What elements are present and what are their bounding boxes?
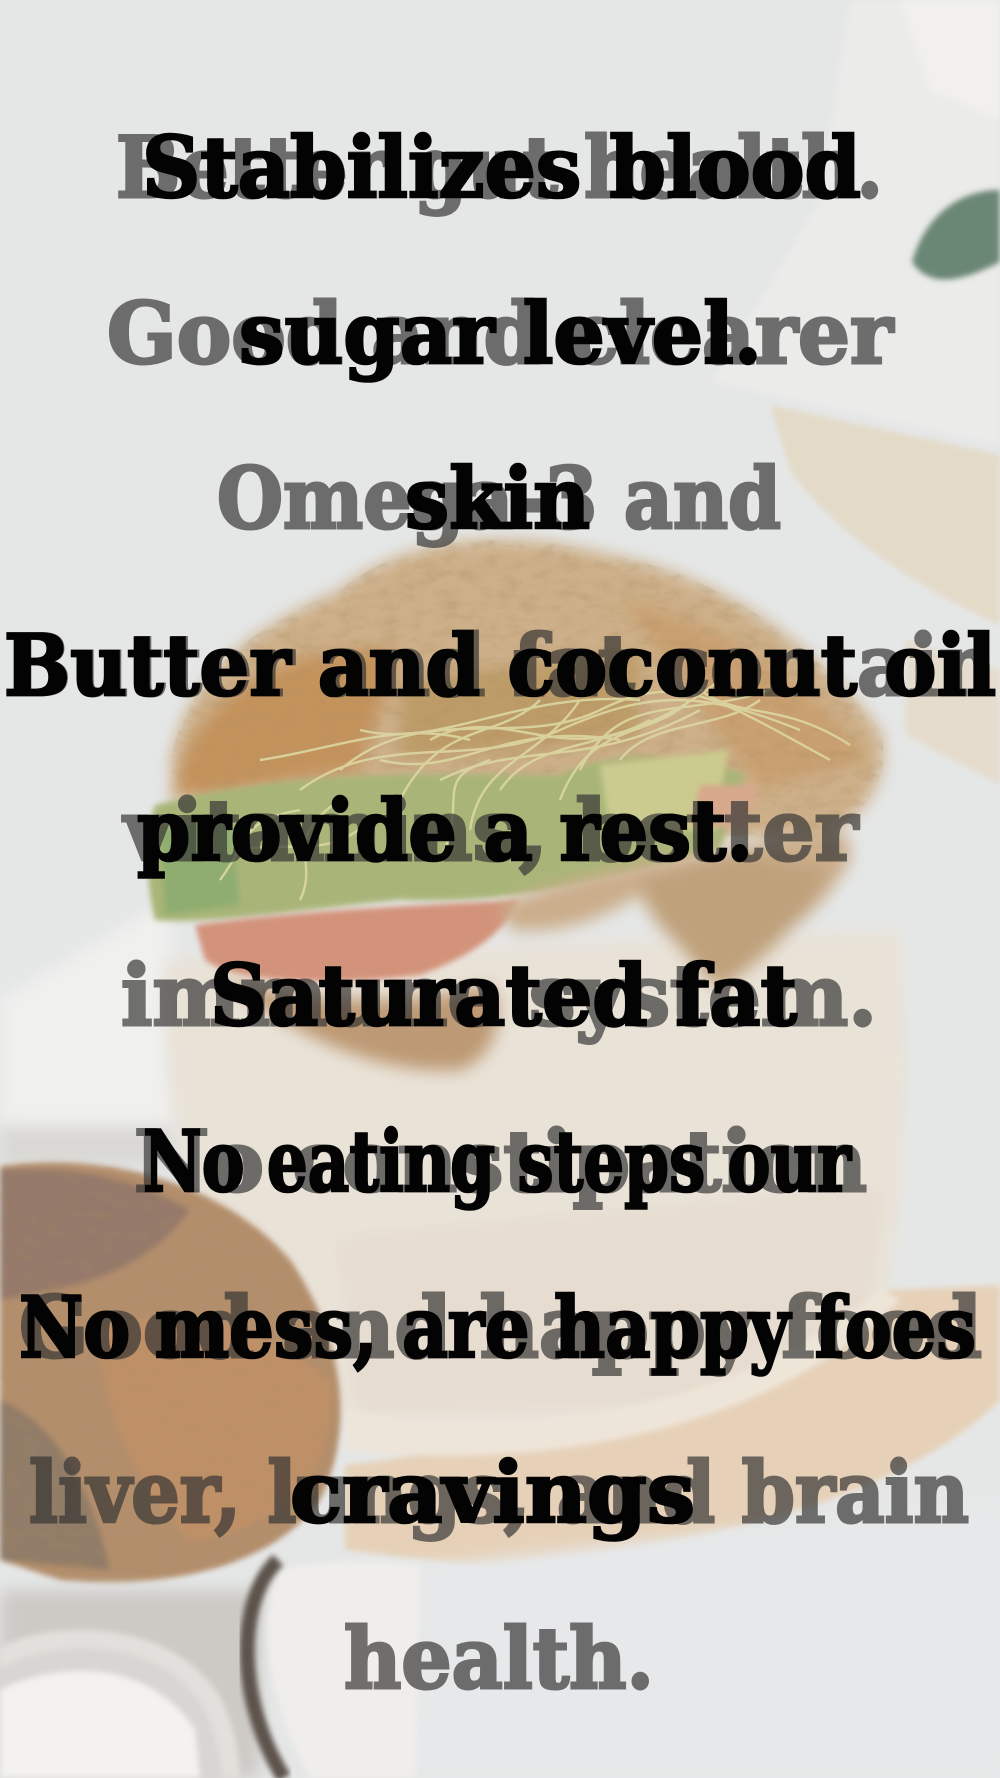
croissant top bun xyxy=(170,540,884,840)
line: vitamins, better: vitamins, better xyxy=(122,781,860,880)
line: Good and clearer: Good and clearer xyxy=(107,284,895,383)
coconut shell xyxy=(0,1162,340,1582)
avocado layer xyxy=(148,750,745,921)
light left fold xyxy=(0,900,175,1165)
icon: green leaf xyxy=(912,190,1000,279)
line: immune system: immune system. xyxy=(121,946,877,1045)
line: cravings: cravings xyxy=(290,1443,695,1542)
croissant sandwich xyxy=(148,540,884,1070)
white paper top right xyxy=(901,2,998,118)
line: sugar level: sugar level. xyxy=(239,284,762,383)
incoming text layer xyxy=(4,118,996,1542)
line: Better gut health: Better gut health. xyxy=(116,118,883,217)
bowl of coconut flakes xyxy=(0,1630,240,1778)
sprouts xyxy=(220,680,850,900)
coconut half white flesh xyxy=(268,1562,420,1778)
dark coconut rim xyxy=(247,1560,284,1778)
tomato slice xyxy=(195,785,760,981)
line: No constipation: No constipation xyxy=(134,1112,867,1211)
wooden board xyxy=(345,1285,1000,1565)
lower table xyxy=(0,1524,739,1778)
line: Stabilizes blood: Stabilizes blood xyxy=(142,118,861,217)
line: provide a rest: provide a rest. xyxy=(137,781,753,880)
line: skin: skin xyxy=(405,449,590,548)
line: Omega-3 and: Omega-3 and xyxy=(217,449,781,548)
line: Saturated fat: Saturated fat xyxy=(210,946,797,1045)
line: Good and happy food: Good and happy food xyxy=(19,1278,982,1377)
glass with milk xyxy=(165,930,906,1425)
tan plate top right xyxy=(770,405,1000,785)
line: health: health. xyxy=(344,1609,654,1708)
croissant bottom bun xyxy=(500,830,851,990)
